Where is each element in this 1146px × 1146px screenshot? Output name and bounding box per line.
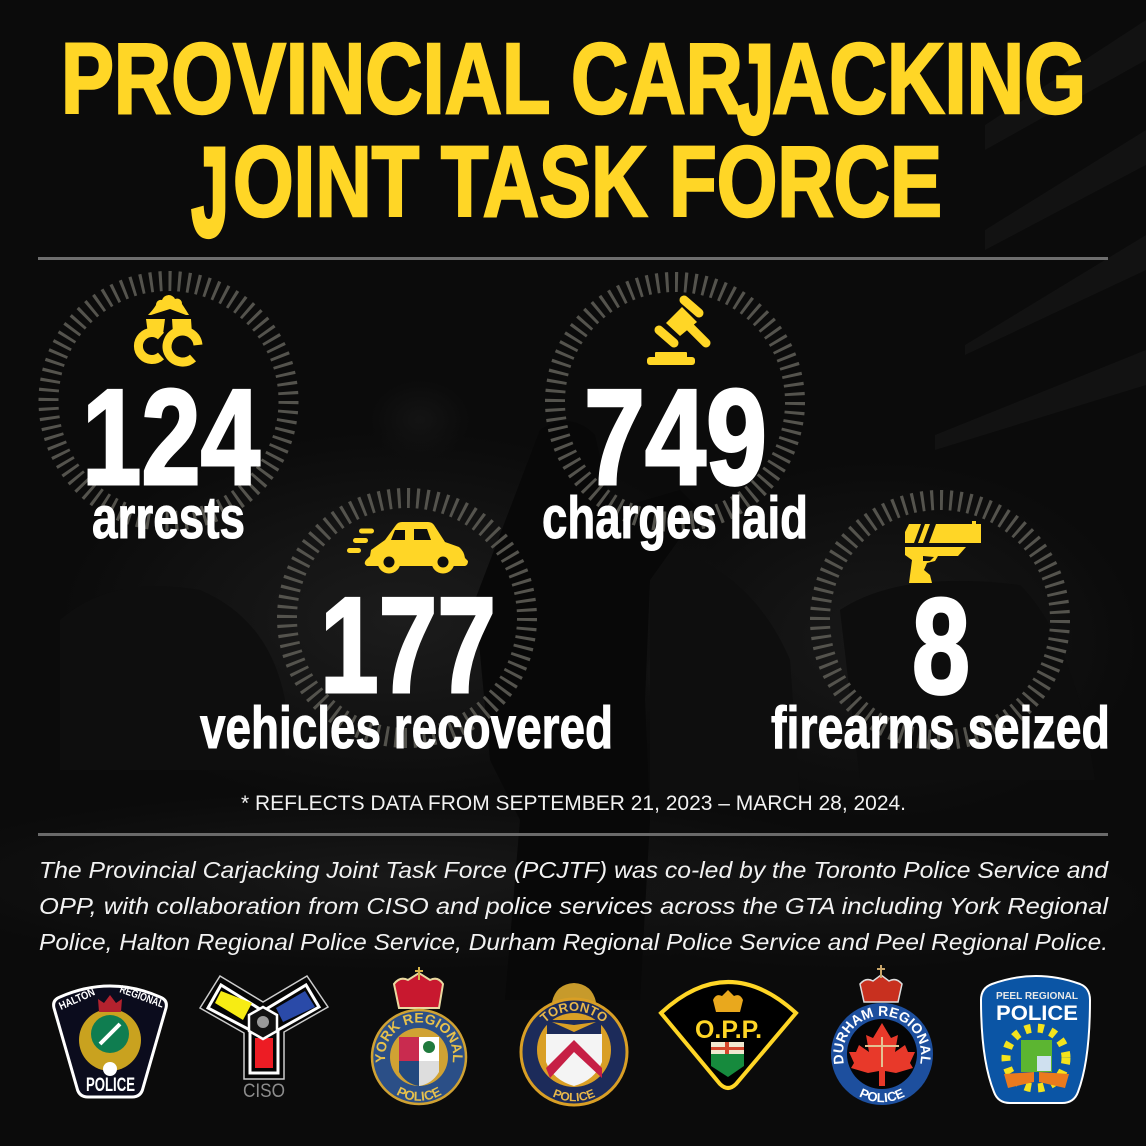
icon: handcuffs bbox=[138, 295, 198, 362]
stat: charges laid: 749 bbox=[584, 361, 767, 513]
logo: OPP bbox=[661, 982, 796, 1088]
stat: firearms seized bbox=[771, 500, 1110, 761]
logo: Durham Regional Police bbox=[831, 965, 933, 1105]
title: OINT TASK FORCE bbox=[233, 126, 942, 238]
logo: Halton Regional Police: POLICE bbox=[86, 1075, 135, 1096]
logo: York Regional Police: YORK REGIONAL bbox=[375, 1013, 463, 1063]
stat: firearms seized: 8 bbox=[912, 570, 970, 722]
stat: arrests bbox=[48, 281, 288, 551]
stat: charges laid bbox=[542, 282, 808, 551]
description paragraph bbox=[39, 857, 1109, 955]
logo: Peel Regional Police bbox=[981, 976, 1090, 1103]
description paragraph: OPP, with collaboration from CISO and police services across the GTA including York Regional bbox=[39, 893, 1109, 919]
icon: car bbox=[347, 522, 468, 574]
stat: vehicles recovered: vehicles recovered bbox=[200, 695, 613, 761]
logo: York Regional Police: POLICE bbox=[396, 1086, 442, 1101]
logo: Toronto Police: TORONTO bbox=[539, 1002, 607, 1022]
logo: CISO: CISO bbox=[243, 1081, 285, 1102]
title: J bbox=[192, 124, 228, 261]
logo: Durham Regional Police: POLICE bbox=[859, 1088, 905, 1102]
stat: charges laid: charges laid bbox=[542, 485, 808, 551]
logo: York Regional Police bbox=[370, 967, 468, 1106]
logo: OPP: O.P.P. bbox=[695, 1016, 762, 1044]
logo: CISO bbox=[200, 976, 328, 1102]
stat: arrests: arrests bbox=[92, 485, 245, 551]
logo: Durham Regional Police: DURHAM REGIONAL bbox=[833, 1006, 931, 1064]
logo: Toronto Police: POLICE bbox=[553, 1089, 596, 1102]
description paragraph: Police, Halton Regional Police Service, Durham Regional Police Service and Peel Regional Police. bbox=[39, 929, 1108, 955]
title: J bbox=[737, 21, 773, 158]
icon: gavel bbox=[647, 300, 706, 365]
title bbox=[61, 21, 1086, 261]
stat: arrests: 124 bbox=[82, 361, 260, 513]
description paragraph: The Provincial Carjacking Joint Task Force (PCJTF) was co-led by the Toronto Police Service and bbox=[39, 857, 1109, 883]
title: PROVINCIAL CAR bbox=[61, 23, 743, 135]
logo: Peel Regional Police: POLICE bbox=[996, 1002, 1078, 1025]
logo: Halton Regional Police: HALTON bbox=[57, 986, 97, 1013]
logo: Halton Regional Police bbox=[54, 984, 166, 1097]
icon: handgun bbox=[905, 521, 981, 583]
footnote: * REFLECTS DATA FROM SEPTEMBER 21, 2023 – MARCH 28, 2024. bbox=[241, 792, 906, 815]
logo: Halton Regional Police: REGIONAL bbox=[118, 984, 166, 1011]
logo: Peel Regional Police: PEEL REGIONAL bbox=[996, 991, 1078, 1002]
stat: vehicles recovered: 177 bbox=[320, 569, 496, 721]
stat: vehicles recovered bbox=[200, 498, 613, 761]
logo: Toronto Police bbox=[520, 983, 628, 1106]
